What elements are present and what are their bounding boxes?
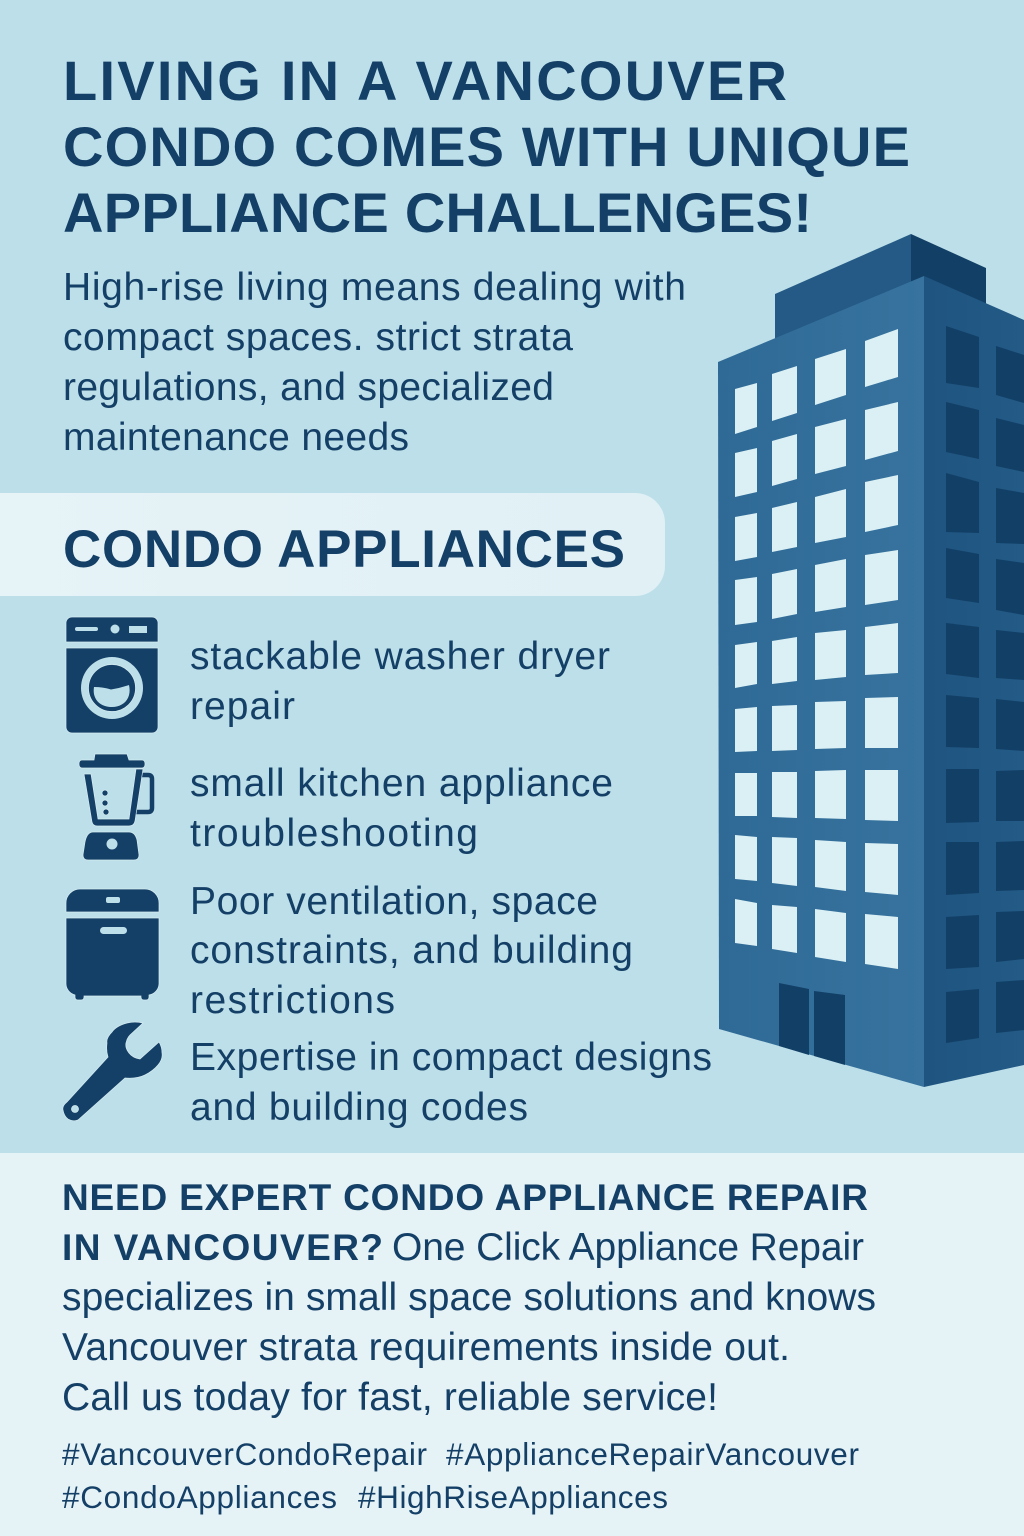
- text: small kitchen appliance: small kitchen appliance: [190, 762, 613, 805]
- intro text block: compact spaces. strict strata: [63, 316, 573, 359]
- illustration: high-rise condo building: [718, 234, 1024, 1087]
- call to action text: IN VANCOUVER?: [62, 1227, 383, 1268]
- text: expertise: Expertise in compact designs: [190, 1036, 712, 1079]
- hashtags: #ApplianceRepairVancouver: [446, 1436, 859, 1472]
- intro text block: maintenance needs: [63, 416, 409, 459]
- text: ventilation and constraints: Poor ventilation, space: [190, 880, 598, 923]
- text: ventilation and constraints: restrictions: [190, 979, 395, 1022]
- text: small kitchen appliance: [190, 762, 613, 855]
- text: expertise: and building codes: [190, 1086, 528, 1129]
- text: washer dryer repair: [190, 635, 610, 728]
- call to action text: specializes in small space solutions and knows: [62, 1276, 876, 1319]
- text: washer dryer repair: stackable washer dryer: [190, 635, 610, 678]
- hashtags: #CondoAppliances: [62, 1479, 337, 1515]
- title: [63, 49, 910, 244]
- call to action text: One Click Appliance Repair: [392, 1226, 864, 1269]
- intro text block: High-rise living means dealing with: [63, 266, 686, 309]
- title: CONDO COMES WITH UNIQUE: [63, 115, 910, 178]
- call to action text: [62, 1177, 876, 1419]
- intro text block: regulations, and specialized: [63, 366, 554, 409]
- title: LIVING IN A VANCOUVER: [63, 49, 787, 112]
- hashtags: #VancouverCondoRepair: [62, 1436, 427, 1472]
- section heading banner: [0, 493, 665, 596]
- text: washer dryer repair: repair: [190, 685, 295, 728]
- icon: dishwasher: [66, 889, 159, 1000]
- intro text block: [63, 266, 686, 459]
- hashtags: #HighRiseAppliances: [358, 1479, 668, 1515]
- text: ventilation and constraints: [190, 880, 633, 1022]
- icon: washer dryer: [66, 617, 158, 733]
- call to action text: NEED EXPERT CONDO APPLIANCE REPAIR: [62, 1177, 868, 1218]
- section heading banner: CONDO APPLIANCES: [63, 520, 625, 579]
- text: small kitchen appliance: troubleshooting: [190, 812, 478, 855]
- icon: blender: [79, 754, 152, 860]
- text: expertise: [190, 1036, 712, 1129]
- panel: call to action: [0, 1153, 1024, 1536]
- title: APPLIANCE CHALLENGES!: [63, 181, 812, 244]
- text: ventilation and constraints: constraints, and building: [190, 929, 633, 972]
- icon: wrench: [63, 1022, 162, 1121]
- call to action text: Vancouver strata requirements inside out.: [62, 1326, 790, 1369]
- call to action text: Call us today for fast, reliable service!: [62, 1376, 718, 1419]
- hashtags: [62, 1436, 859, 1515]
